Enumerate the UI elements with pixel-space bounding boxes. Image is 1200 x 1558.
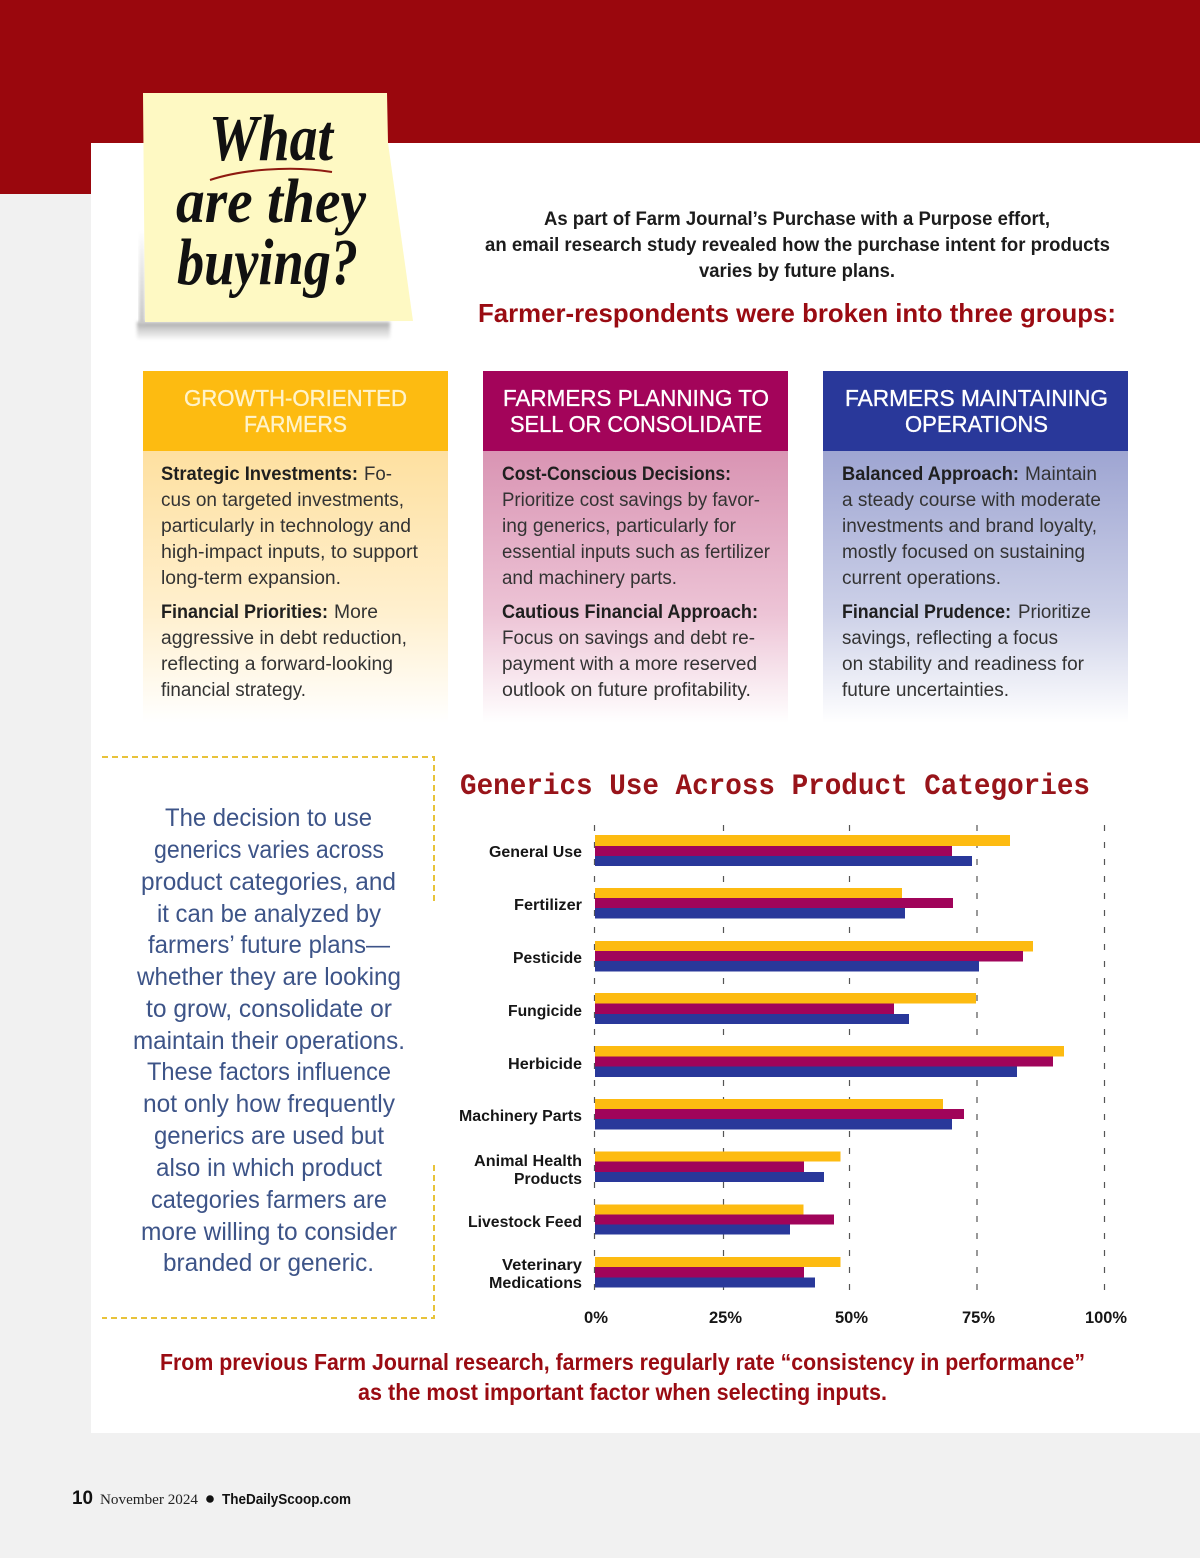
category labels: Products xyxy=(514,1171,582,1188)
sticky note: What are they buying? xyxy=(137,93,413,339)
closing statement xyxy=(160,1349,1085,1405)
panel: farmers maintaining operations: Prioritize xyxy=(1018,602,1091,623)
panel: farmers maintaining operations xyxy=(823,371,1128,723)
callout text: farmers’ future plans— xyxy=(148,931,390,959)
bars: Fertilizer xyxy=(595,888,953,918)
panel: growth-oriented farmers: Strategic Investments: xyxy=(161,464,358,485)
panel: farmers planning to sell or consolidate: Cautious Financial Approach: xyxy=(502,602,758,623)
panel: growth-oriented farmers: More xyxy=(334,602,378,623)
panel: farmers maintaining operations: current operations. xyxy=(842,568,1001,589)
bars: Pesticide xyxy=(595,941,1033,972)
closing statement: as the most important factor when selecting inputs. xyxy=(358,1379,887,1405)
chart title: Generics Use Across Product Categories xyxy=(460,770,1090,804)
panel: farmers maintaining operations: FARMERS MAINTAINING xyxy=(845,385,1108,411)
panel: farmers planning to sell or consolidate: outlook on future profitability. xyxy=(502,680,751,701)
panel: farmers maintaining operations: OPERATIONS xyxy=(905,411,1048,437)
panel: farmers maintaining operations: Maintain xyxy=(1025,464,1097,485)
callout text: maintain their operations. xyxy=(133,1027,405,1055)
callout text: more willing to consider xyxy=(141,1218,397,1246)
panel: growth-oriented farmers: GROWTH-ORIENTED xyxy=(184,385,407,411)
x axis labels: 50% xyxy=(835,1308,868,1327)
x axis labels: 75% xyxy=(962,1308,995,1327)
panel: farmers planning to sell or consolidate: essential inputs such as fertilizer xyxy=(502,542,771,563)
intro text: an email research study revealed how the purchase intent for products xyxy=(485,235,1110,256)
callout text: branded or generic. xyxy=(163,1249,374,1277)
bars: General Use xyxy=(595,835,1010,866)
intro text: As part of Farm Journal’s Purchase with a Purpose effort, xyxy=(544,209,1050,230)
category labels: Fungicide xyxy=(508,1003,582,1020)
category labels: Machinery Parts xyxy=(459,1108,582,1125)
panel: farmers planning to sell or consolidate: FARMERS PLANNING TO xyxy=(503,385,769,411)
white content panel xyxy=(91,143,1200,1433)
panel: growth-oriented farmers: particularly in technology and xyxy=(161,516,411,537)
category labels xyxy=(459,844,582,1292)
callout text: whether they are looking xyxy=(136,963,401,991)
panel: farmers maintaining operations: investments and brand loyalty, xyxy=(842,516,1097,537)
category labels: Livestock Feed xyxy=(468,1214,582,1231)
bar chart: generics use xyxy=(459,825,1127,1327)
bars: Machinery Parts xyxy=(595,1099,964,1130)
sticky note: What are they buying?: buying? xyxy=(177,226,358,299)
category labels: Pesticide xyxy=(513,950,582,967)
bars: Veterinary Medications xyxy=(595,1257,840,1288)
intro text xyxy=(485,209,1110,282)
x axis labels: 0% xyxy=(584,1308,608,1327)
panel: growth-oriented farmers: high-impact inputs, to support xyxy=(161,542,419,563)
footer: TheDailyScoop.com xyxy=(222,1491,351,1508)
panel: farmers maintaining operations: mostly focused on sustaining xyxy=(842,542,1085,563)
panel: growth-oriented farmers: financial strategy. xyxy=(161,680,306,701)
bars: Animal Health Products xyxy=(595,1152,840,1182)
bars: Livestock Feed xyxy=(595,1204,834,1234)
panel: farmers planning to sell or consolidate: Focus on savings and debt re- xyxy=(502,628,755,649)
panel: farmers maintaining operations: on stability and readiness for xyxy=(842,654,1085,675)
panel: farmers planning to sell or consolidate: Cost-Conscious Decisions: xyxy=(502,464,731,485)
x axis labels: 100% xyxy=(1085,1308,1127,1327)
callout frame: dashed bracket xyxy=(102,757,434,1318)
callout text: not only how frequently xyxy=(143,1090,395,1118)
intro text: varies by future plans. xyxy=(699,261,895,282)
panel: farmers planning to sell or consolidate: SELL OR CONSOLIDATE xyxy=(510,411,762,437)
bars: Fungicide xyxy=(595,993,976,1024)
callout text: it can be analyzed by xyxy=(157,900,381,928)
panel: growth-oriented farmers: cus on targeted investments, xyxy=(161,490,404,511)
callout text: product categories, and xyxy=(141,868,396,896)
sticky note: What are they buying?: What xyxy=(209,102,334,175)
panel: farmers maintaining operations: a steady course with moderate xyxy=(842,490,1101,511)
x axis labels xyxy=(584,1308,1127,1327)
panel: growth-oriented farmers: Fo- xyxy=(364,464,392,485)
category labels: General Use xyxy=(489,844,582,861)
callout text: categories farmers are xyxy=(151,1186,387,1214)
sticky note: What are they buying?: are they xyxy=(176,168,366,236)
panel: growth-oriented farmers: FARMERS xyxy=(244,411,347,437)
category labels: Animal Health xyxy=(474,1153,582,1170)
closing statement: From previous Farm Journal research, farmers regularly rate “consistency in performance” xyxy=(160,1349,1085,1375)
callout text: to grow, consolidate or xyxy=(146,995,392,1023)
callout text: generics varies across xyxy=(154,836,384,864)
panel: growth-oriented farmers xyxy=(143,371,448,723)
x axis labels: 25% xyxy=(709,1308,742,1327)
panel: farmers maintaining operations: future uncertainties. xyxy=(842,680,1009,701)
panel: growth-oriented farmers: long-term expansion. xyxy=(161,568,341,589)
subheading: Farmer-respondents were broken into three groups: xyxy=(478,298,1116,328)
callout text: These factors influence xyxy=(147,1058,391,1086)
callout text xyxy=(133,804,405,1277)
callout text: generics are used but xyxy=(154,1122,384,1150)
panel: farmers planning to sell or consolidate: and machinery parts. xyxy=(502,568,677,589)
panel: growth-oriented farmers: reflecting a forward-looking xyxy=(161,654,393,675)
panel: farmers maintaining operations: Financial Prudence: xyxy=(842,602,1011,623)
category labels: Herbicide xyxy=(508,1056,582,1073)
panel: growth-oriented farmers: Financial Priorities: xyxy=(161,602,328,623)
bars: Herbicide xyxy=(595,1046,1064,1077)
panel: farmers planning to sell or consolidate: ing generics, particularly for xyxy=(502,516,737,537)
panel: farmers maintaining operations: savings, reflecting a focus xyxy=(842,628,1058,649)
footer xyxy=(72,1488,351,1509)
footer: November 2024 xyxy=(100,1492,199,1508)
panel: farmers planning to sell or consolidate: Prioritize cost savings by favor- xyxy=(502,490,760,511)
category labels: Fertilizer xyxy=(514,897,582,914)
panel: farmers planning to sell or consolidate xyxy=(483,371,788,723)
panel: farmers maintaining operations: Balanced Approach: xyxy=(842,464,1019,485)
category labels: Medications xyxy=(489,1275,582,1292)
panel: growth-oriented farmers: aggressive in debt reduction, xyxy=(161,628,407,649)
category labels: Veterinary xyxy=(502,1257,582,1274)
red header band xyxy=(0,0,1200,194)
footer: 10 xyxy=(72,1488,93,1509)
callout text: The decision to use xyxy=(165,804,372,832)
panel: farmers planning to sell or consolidate: payment with a more reserved xyxy=(502,654,757,675)
callout text: also in which product xyxy=(156,1154,382,1182)
